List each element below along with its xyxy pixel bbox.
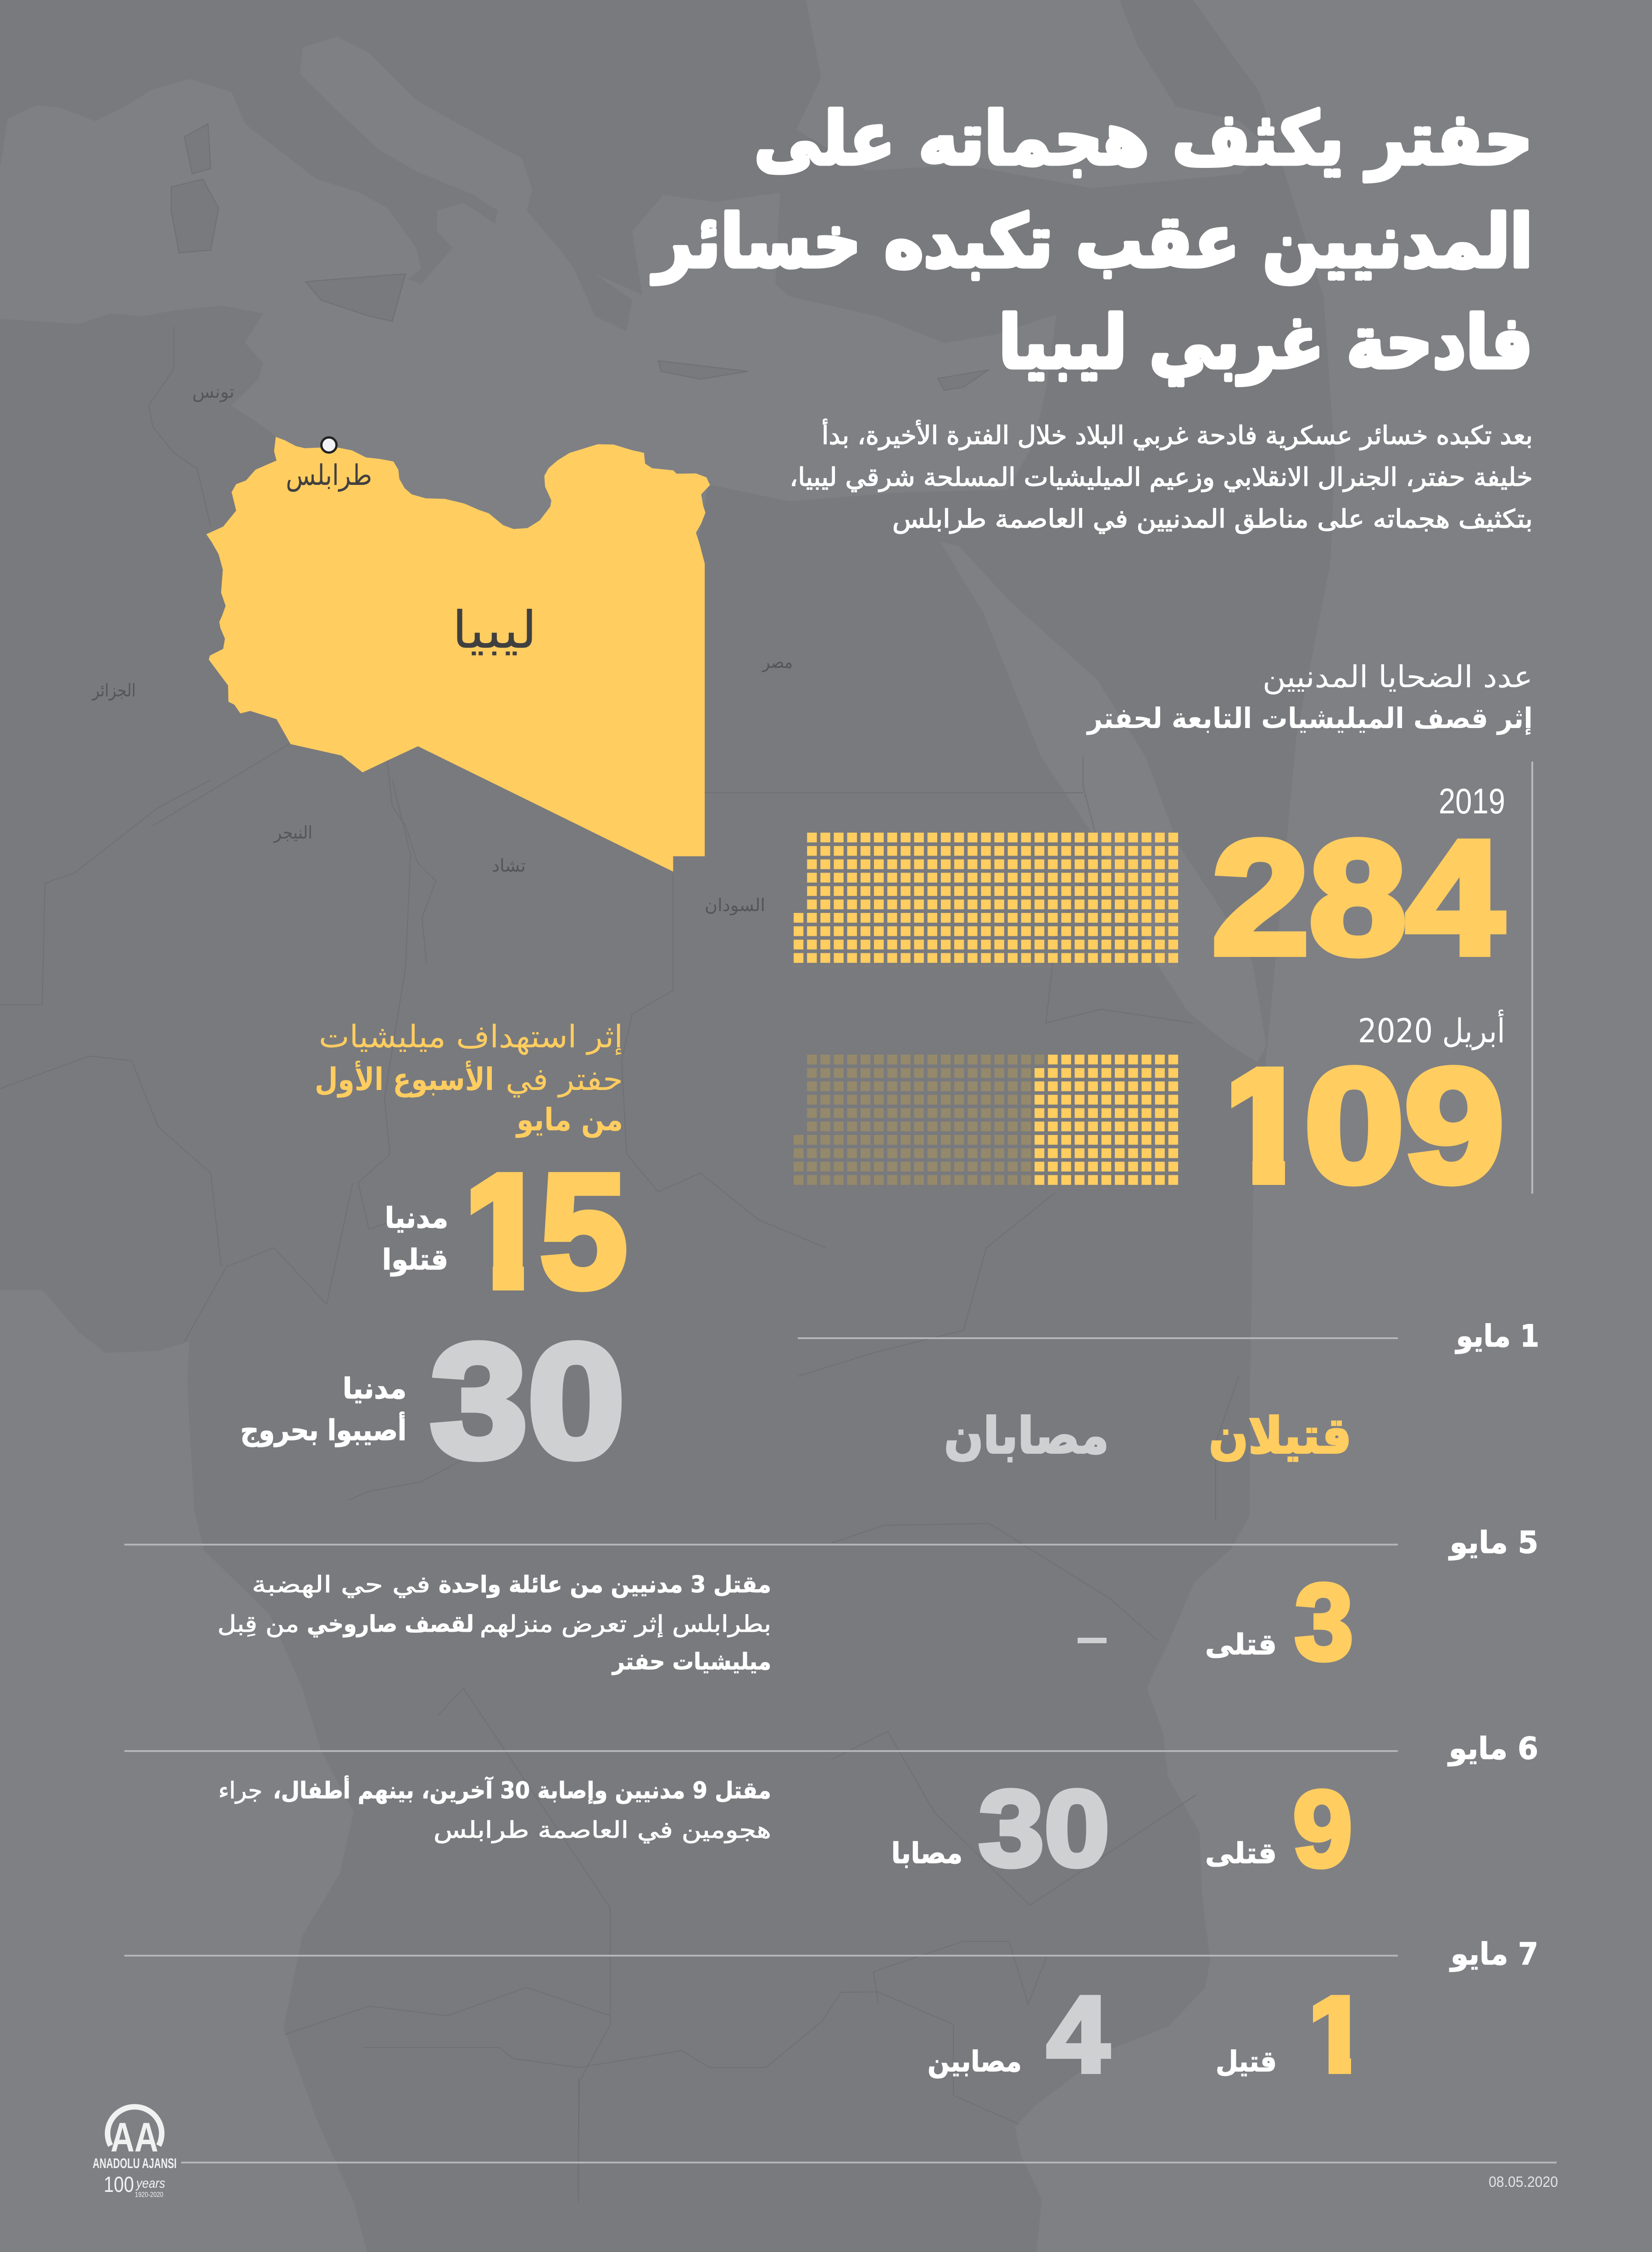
stat: April 2020 bbox=[794, 1009, 1504, 1189]
caption killed: قتيل bbox=[1216, 2045, 1277, 2078]
number 109: 1 bbox=[1217, 1035, 1311, 1216]
killed 9: 9 bbox=[1293, 1768, 1352, 1890]
note: من قِبل bbox=[217, 1611, 299, 1637]
killed 3: 3 bbox=[1295, 1562, 1353, 1683]
date stamp: 08.05.2020 bbox=[1489, 2174, 1558, 2190]
first week of May heading bbox=[315, 1019, 623, 1138]
vertical rule bbox=[1531, 762, 1533, 1194]
number 30: 30 bbox=[430, 1310, 625, 1491]
intro text: بعد تكبده خسائر عسكرية فادحة غربي البلاد خلال الفترة الأخيرة، بدأ bbox=[822, 419, 1533, 450]
note: مقتل 9 مدنيين وإصابة 30 آخرين، بينهم أطفال، bbox=[273, 1775, 771, 1804]
row: 6 May bbox=[218, 1768, 1352, 1890]
column headers bbox=[944, 1407, 1352, 1465]
AA letters: AA bbox=[111, 2115, 158, 2161]
waffle chart 109 bbox=[794, 1055, 1182, 1189]
note bbox=[218, 1775, 771, 1843]
title bbox=[651, 97, 1533, 385]
number 109: 09 bbox=[1304, 1035, 1504, 1216]
caption killed: قتلى bbox=[1205, 1836, 1277, 1870]
title: فادحة غربي ليبيا bbox=[999, 300, 1533, 385]
column headers: قتيلان bbox=[1209, 1407, 1352, 1465]
column headers: مصابان bbox=[944, 1407, 1109, 1465]
date labels: 5 مايو bbox=[1448, 1525, 1538, 1561]
note: مقتل 3 مدنيين من عائلة واحدة bbox=[439, 1571, 771, 1598]
Tripoli marker bbox=[321, 438, 337, 452]
caption: مدنيا bbox=[385, 1201, 448, 1234]
period label: أبريل 2020 bbox=[1358, 1009, 1505, 1051]
caption injured: مصابين bbox=[928, 2045, 1022, 2078]
stat: 2019 bbox=[794, 781, 1505, 988]
stat: 30 injured bbox=[240, 1310, 625, 1491]
label: Tripoli: طرابلس bbox=[286, 458, 372, 492]
country labels: مصر bbox=[762, 652, 793, 673]
first week of May heading: حفتر في bbox=[506, 1062, 623, 1098]
date labels: 1 مايو bbox=[1455, 1318, 1539, 1354]
country labels: تشاد bbox=[492, 856, 526, 876]
map: Libya bbox=[206, 437, 710, 872]
first week of May heading: إثر استهداف ميليشيات bbox=[319, 1019, 623, 1055]
waffle chart 284 bbox=[794, 833, 1182, 967]
number 109 bbox=[1231, 1065, 1502, 1186]
date labels bbox=[1447, 1318, 1539, 1972]
country labels: السودان bbox=[705, 895, 765, 916]
icon: arch bbox=[107, 2107, 162, 2146]
note: هجومين في العاصمة طرابلس bbox=[434, 1817, 771, 1843]
caption injured: مصابا bbox=[891, 1836, 962, 1870]
note bbox=[217, 1571, 771, 1675]
date labels: 7 مايو bbox=[1449, 1936, 1538, 1972]
logo: Anadolu Ajansi: 1920-2020 bbox=[135, 2191, 163, 2199]
number 15: 1 bbox=[459, 1140, 549, 1321]
number 15 bbox=[471, 1172, 627, 1292]
intro text: خليفة حفتر، الجنرال الانقلابي وزعيم الميليشيات المسلحة شرقي ليبيا، bbox=[790, 462, 1533, 492]
date labels: 6 مايو bbox=[1447, 1731, 1538, 1767]
number 284: 284 bbox=[1212, 807, 1504, 988]
Libya shape bbox=[206, 437, 710, 872]
civilian casualties heading: إثر قصف الميليشيات التابعة لحفتر bbox=[1086, 701, 1533, 735]
caption: مدنيا bbox=[343, 1372, 406, 1405]
logo: Anadolu Ajansi: years bbox=[135, 2176, 165, 2191]
100 years: 100 bbox=[104, 2173, 134, 2197]
stat: 15 killed bbox=[384, 1172, 627, 1292]
row: 5 May bbox=[217, 1562, 1353, 1683]
logo: Anadolu Ajansi bbox=[93, 2107, 177, 2199]
title: المدنيين عقب تكبده خسائر bbox=[651, 200, 1533, 284]
injured 4: 4 bbox=[1047, 1974, 1109, 2095]
note: في حي الهضبة bbox=[252, 1571, 430, 1598]
label: Libya: ليبيا bbox=[452, 601, 537, 660]
row: 7 May bbox=[929, 1995, 1351, 2079]
year label: 2019 bbox=[1439, 781, 1505, 821]
injured 30: 30 bbox=[979, 1768, 1110, 1889]
note: جراء bbox=[218, 1777, 262, 1804]
caption bbox=[382, 1201, 448, 1276]
title: حفتر يكثف هجماته على bbox=[754, 97, 1533, 182]
first week of May heading: الأسبوع الأول bbox=[315, 1060, 494, 1098]
note: لقصف صاروخي bbox=[307, 1611, 474, 1638]
country labels bbox=[91, 382, 793, 916]
intro text: بتكثيف هجماته على مناطق المدنيين في العاصمة طرابلس bbox=[892, 504, 1533, 534]
country labels: النيجر bbox=[273, 823, 312, 843]
civilian casualties heading bbox=[1086, 659, 1533, 735]
timeline rules bbox=[124, 1337, 1557, 2163]
killed 1: 1 bbox=[1303, 1974, 1369, 2095]
caption killed: قتلى bbox=[1205, 1628, 1277, 1661]
caption: أصيبوا بحروج bbox=[240, 1412, 406, 1447]
first week of May heading: من مايو bbox=[515, 1102, 623, 1138]
note: ميليشيات حفتر bbox=[611, 1648, 771, 1675]
caption: قتلوا bbox=[382, 1243, 448, 1276]
injured none bbox=[1078, 1638, 1107, 1643]
agency name: ANADOLU AJANSI bbox=[93, 2155, 177, 2171]
country labels: الجزائر bbox=[91, 680, 136, 701]
caption bbox=[240, 1372, 406, 1447]
note: بطرابلس إثر تعرض منزلهم bbox=[480, 1611, 771, 1638]
country labels: تونس bbox=[192, 382, 234, 402]
civilian casualties heading: عدد الضحايا المدنيين bbox=[1263, 659, 1533, 695]
number 15: 5 bbox=[540, 1140, 627, 1321]
intro text bbox=[790, 419, 1533, 534]
